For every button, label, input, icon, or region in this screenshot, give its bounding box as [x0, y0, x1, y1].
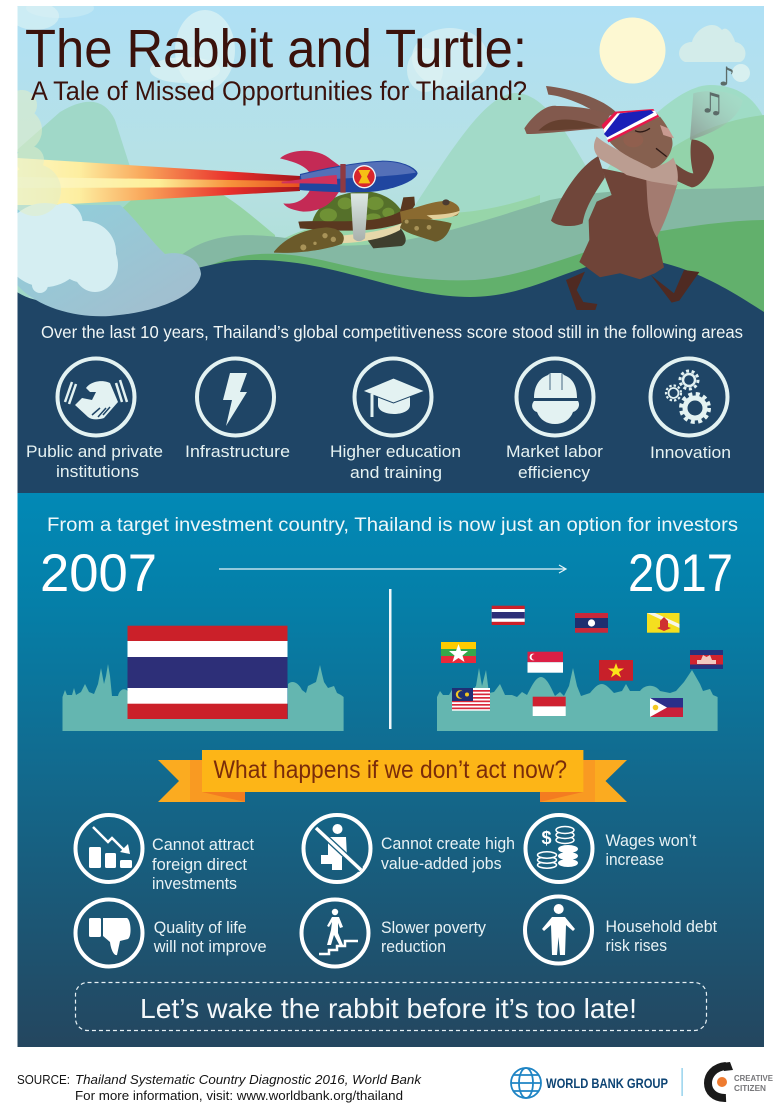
flag: Malaysia [452, 688, 490, 711]
rabbit collar [594, 137, 678, 186]
labels: areas [26, 442, 731, 482]
text: household debt: Household debt [606, 918, 717, 936]
heading: investment: From a target investment country, Thailand is now just an option for investors [47, 515, 738, 536]
exhaust flame [17, 158, 300, 207]
logo: Creative Citizen [708, 1062, 774, 1098]
text: poverty reduction [381, 919, 487, 956]
icon: lightning bolt [197, 358, 274, 436]
footer: source: SOURCE: [17, 1072, 70, 1087]
icon: sun [600, 18, 666, 84]
text: intro: Over the last 10 years, Thailand’s global competitiveness score stood still in the following areas [41, 322, 743, 342]
rabbit belly [646, 177, 677, 237]
text: household debt [606, 918, 717, 955]
turtle lower jaw [427, 211, 460, 219]
ribbon main [202, 750, 583, 792]
left tail [158, 760, 202, 802]
flag: Thailand [492, 606, 525, 625]
year 2017: 2017 [628, 544, 733, 603]
text: foreign direct investment: investments [152, 875, 237, 893]
turtle with rocket [274, 151, 460, 253]
panel: competitiveness areas [18, 322, 764, 493]
text: household debt: risk rises [606, 937, 667, 955]
music notes: ♫ [699, 87, 724, 120]
rocket bottom fin [283, 190, 340, 212]
callout [76, 982, 706, 1030]
divider logo [682, 1068, 683, 1096]
text: wages: Wages won’t [606, 832, 697, 850]
year 2007: 2007 [40, 544, 157, 603]
icon: graduation cap [354, 358, 432, 436]
rabbit right arm [675, 139, 714, 187]
text: wages [606, 832, 697, 869]
cloud and smoke left [0, 90, 201, 316]
text: poverty reduction: reduction [381, 938, 446, 956]
rabbit head [607, 117, 673, 168]
skyline right [437, 668, 718, 731]
logo: World Bank Group [511, 1068, 668, 1098]
rocket nozzle fin [282, 175, 337, 184]
panel: hero illustration [0, 0, 764, 346]
icon: stairs [302, 900, 368, 966]
rabbit [524, 62, 743, 310]
footer: source: Thailand Systematic Country Diagnostic 2016, World Bank [75, 1072, 423, 1087]
icon: hard hat [516, 358, 594, 436]
divider [389, 589, 392, 729]
labels: areas: efficiency [518, 463, 591, 482]
labels: areas: Public and private [26, 442, 163, 461]
footer: source [17, 1072, 423, 1103]
background clouds [11, 0, 488, 92]
turtle shell [312, 192, 405, 232]
icon: household debt [525, 896, 592, 964]
turtle shell rim [298, 197, 415, 231]
labels: areas: and training [350, 463, 442, 482]
base strip under flag [120, 719, 295, 731]
rabbit cheek [623, 133, 643, 147]
flag: Brunei [647, 613, 680, 633]
labels: areas: Market labor [506, 442, 603, 461]
text: value-added jobs: Cannot create high [381, 835, 515, 853]
ASEAN emblem [353, 165, 376, 188]
icon: bubble [732, 64, 750, 82]
hill bands [17, 186, 764, 346]
skyline left [62, 664, 344, 731]
flag: Philippines [650, 698, 683, 717]
text: quality of life [153, 919, 267, 956]
flag: Vietnam [599, 660, 633, 681]
background hills [17, 85, 764, 300]
icon: falling chart [76, 815, 142, 882]
turtle spots [300, 233, 336, 250]
turtle front leg [400, 219, 452, 242]
flag: Myanmar [441, 642, 476, 663]
text: wages: increase [606, 851, 664, 869]
flag: Indonesia [533, 697, 566, 716]
rabbit headband [602, 109, 659, 142]
rabbit nose [660, 125, 674, 138]
right fold [540, 760, 595, 802]
music cone [690, 92, 734, 140]
subtitle: A Tale of Missed Opportunities for Thailand? [31, 76, 527, 106]
labels: areas: Innovation [650, 443, 731, 462]
icon: coins [526, 815, 592, 882]
rabbit ears [524, 86, 617, 134]
rabbit torso [579, 168, 677, 279]
turtle eye [442, 199, 450, 205]
text: foreign direct investment: Cannot attract [152, 836, 254, 854]
footer: source: For more information, visit: www.worldbank.org/thailand [75, 1088, 403, 1103]
turtle neck and head [400, 200, 460, 224]
text: foreign direct investment: foreign direct [152, 856, 247, 874]
rocket stripe [340, 164, 346, 193]
turtle rear leg [274, 227, 344, 253]
arrow: timeline [219, 565, 566, 573]
ribbon [158, 750, 627, 802]
flag: Laos [575, 613, 608, 633]
labels: areas: Higher education [330, 442, 461, 461]
icon: thumbs down [76, 900, 142, 966]
logo: World Bank Group: WORLD BANK GROUP [546, 1075, 668, 1091]
rocket strap [351, 193, 368, 241]
labels: areas: institutions [56, 462, 139, 481]
flag: Thailand large [128, 626, 288, 719]
rabbit legs [566, 270, 699, 310]
text: quality of life: will not improve [153, 938, 267, 956]
turtle dark front leg [365, 227, 406, 248]
icon: cloud top right [679, 25, 745, 62]
icon: handshake [58, 358, 134, 436]
rocket body [299, 161, 418, 192]
icon: gears [650, 358, 728, 436]
rocket top fin [280, 151, 340, 173]
rocket body highlight [301, 162, 416, 181]
logo: Creative Citizen: CITIZEN [734, 1084, 766, 1093]
icon: no jobs [304, 815, 370, 882]
music note small: ♪ [718, 62, 735, 92]
icon: coins: $ [541, 828, 552, 848]
logo: Creative Citizen: CREATIVE [734, 1074, 774, 1083]
text: value-added jobs: value-added jobs [381, 855, 502, 873]
panel: investment and actions [18, 493, 764, 1047]
flag: Cambodia [690, 650, 723, 669]
labels: areas: Infrastructure [185, 442, 290, 461]
text: foreign direct investment [152, 836, 254, 893]
text: quality of life: Quality of life [154, 919, 247, 937]
text: value-added jobs [381, 835, 515, 873]
left fold [190, 760, 245, 802]
flag: Singapore [528, 652, 563, 673]
text: question: What happens if we don’t act now? [214, 756, 567, 784]
callout: Let’s wake the rabbit before it’s too late! [140, 993, 637, 1024]
turtle plastron [342, 224, 402, 244]
rabbit left arm [551, 156, 605, 226]
text: poverty reduction: Slower poverty [381, 919, 487, 937]
title: The Rabbit and Turtle: [25, 19, 527, 79]
right tail [583, 760, 627, 802]
rabbit smile and eye [635, 128, 667, 157]
